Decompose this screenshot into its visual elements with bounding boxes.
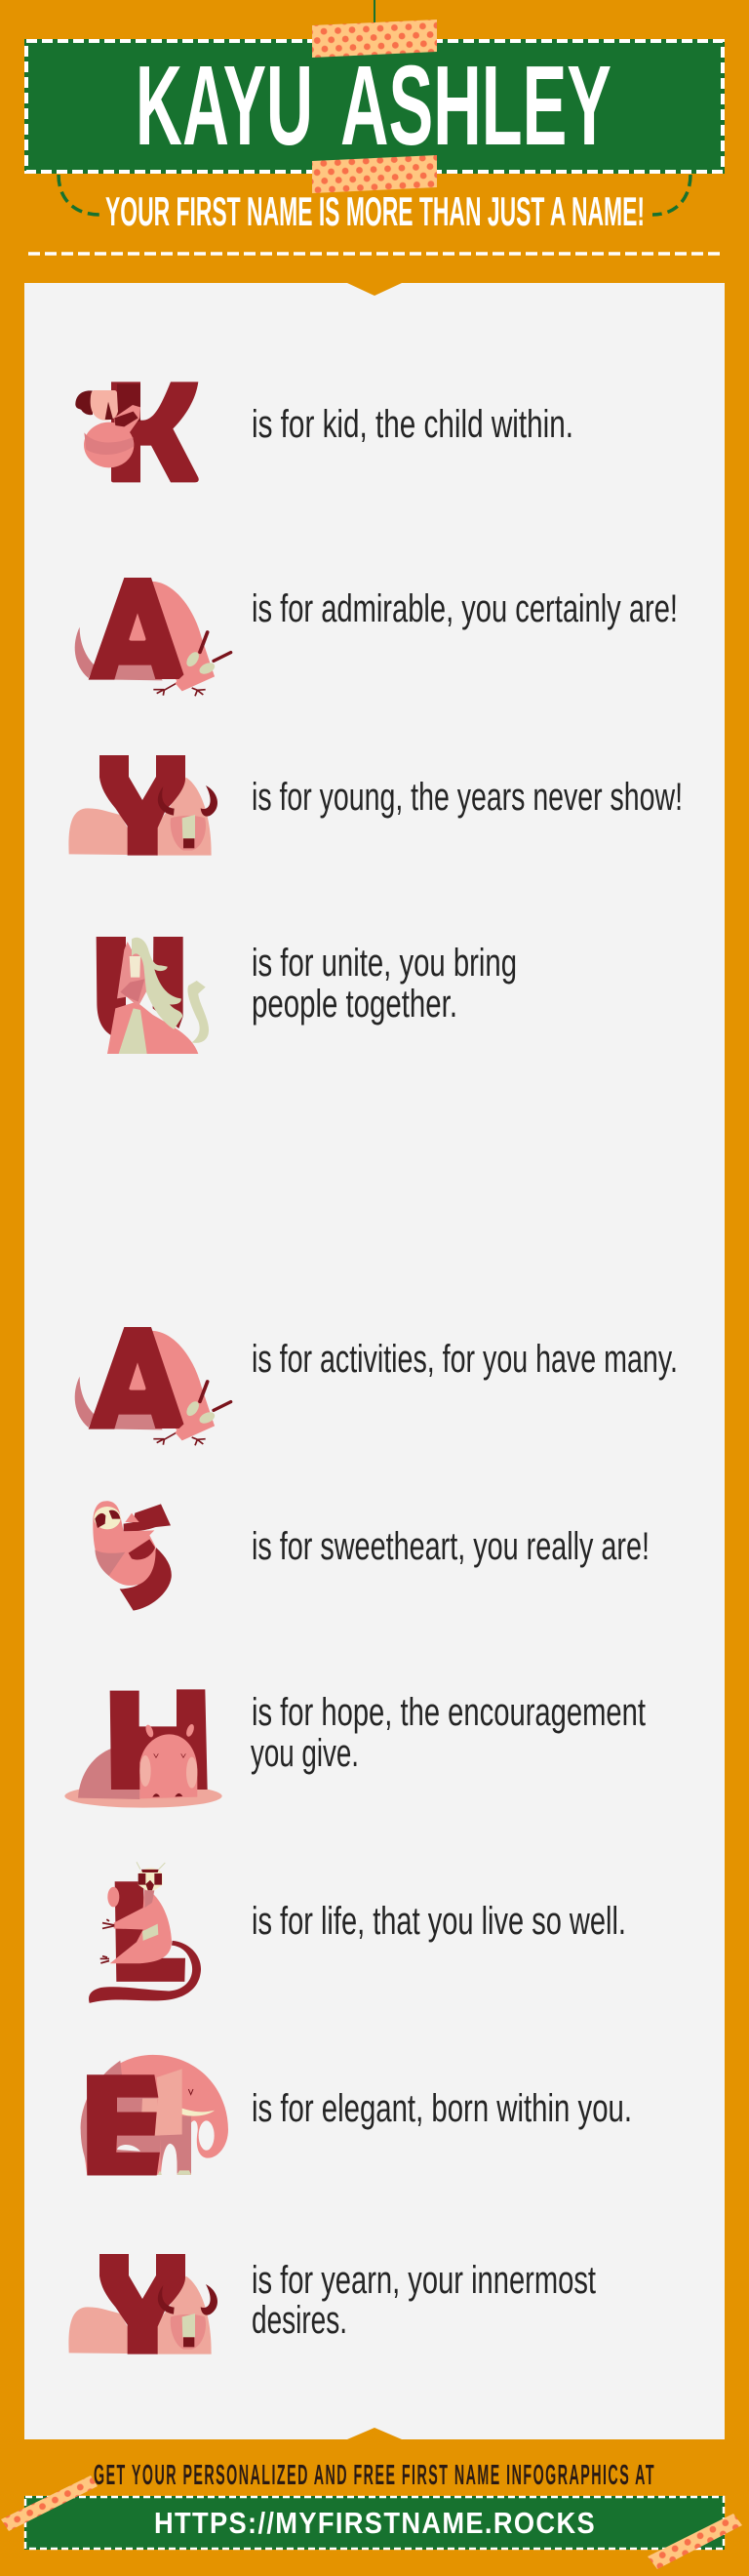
icon: S sloth	[93, 1501, 172, 1611]
divider	[28, 252, 720, 256]
footer banner	[24, 2496, 725, 2550]
icon: U horse	[97, 937, 209, 1054]
icon: H hippo	[64, 1689, 222, 1808]
title: KAYU	[136, 42, 313, 169]
text: Y second: desires.	[252, 2299, 347, 2342]
tape: bottom	[312, 155, 437, 193]
title banner	[24, 39, 725, 174]
icon: K koala	[75, 382, 199, 482]
top hanging line	[374, 0, 375, 23]
text: U	[252, 942, 517, 1026]
icon: L monkey	[89, 1862, 201, 2003]
panel: letters	[24, 283, 725, 2439]
footer url: HTTPS://MYFIRSTNAME.ROCKS	[154, 2507, 596, 2540]
connector: right	[652, 175, 690, 215]
tape: top	[312, 20, 437, 58]
icon: Y bison	[68, 755, 217, 856]
text: U: is for unite, you bring	[252, 942, 517, 985]
tape: footer left	[1, 2475, 98, 2531]
text: H: you give.	[251, 1732, 359, 1775]
text: K: is for kid, the child within.	[252, 403, 573, 446]
text: Y second: is for yearn, your innermost	[252, 2259, 596, 2302]
icon: A armadillo repeat	[75, 1327, 231, 1445]
icon: E elephant	[81, 2055, 228, 2176]
text: Y second	[252, 2259, 596, 2342]
text: U: people together.	[252, 983, 457, 1026]
tape: footer right	[648, 2514, 742, 2569]
connector: left	[59, 175, 100, 215]
icon: A armadillo	[75, 578, 231, 696]
text: H	[251, 1691, 646, 1775]
icon: Y bison repeat	[68, 2254, 217, 2355]
